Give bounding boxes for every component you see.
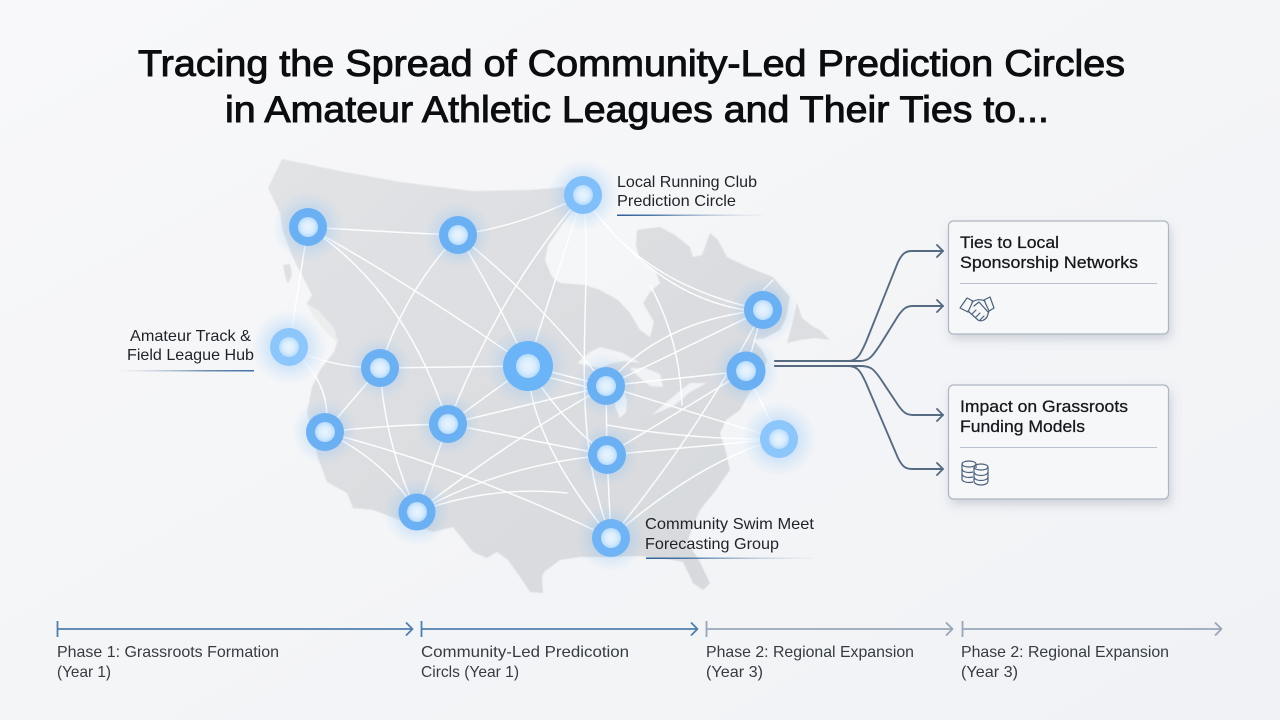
arrow: to sponsorship icon (775, 300, 943, 361)
phase: regional expansion repeat: (Year 3) (961, 664, 1018, 681)
phase: regional expansion repeat (961, 621, 1222, 681)
label: Local Running Club (617, 174, 763, 216)
card heading (960, 398, 1128, 436)
title (138, 43, 1125, 130)
node: track and field league hub (251, 309, 327, 385)
node: southwest (383, 478, 451, 546)
connector arrows to cards (775, 245, 943, 475)
timeline (57, 621, 1222, 681)
node: central hub (486, 324, 570, 408)
phase: community-led circles (421, 621, 698, 681)
node: Quebec (729, 276, 797, 344)
map: Haida Gwaii (283, 264, 292, 284)
arrow: to funding top (775, 366, 943, 421)
map of North America (268, 159, 830, 593)
card heading: Ties to Local (960, 234, 1059, 252)
icon: coin stacks (962, 461, 988, 485)
label: Community Swim Meet (645, 516, 815, 559)
label: Amateur Track and Field: Field League Hub (127, 347, 254, 364)
node: local running club (547, 159, 619, 231)
phase: grassroots formation (57, 621, 412, 681)
node: Idaho (348, 336, 412, 400)
network connections (289, 195, 779, 538)
map: Lake Huron (630, 368, 663, 387)
card: grassroots funding (948, 385, 1168, 499)
phase: community-led circles: Circls (Year 1) (421, 664, 519, 681)
node: northwest (272, 191, 344, 263)
map: Newfoundland (787, 302, 830, 343)
phase: regional expansion: (Year 3) (706, 664, 763, 681)
node: Missouri (575, 423, 639, 487)
node: Wisconsin (574, 354, 638, 418)
label: Community Swim Meet: Forecasting Group (645, 536, 779, 553)
card: sponsorship networks (948, 221, 1168, 334)
card heading: Impact on Grassroots (960, 398, 1128, 416)
label: Amateur Track and Field: Amateur Track & (130, 328, 251, 345)
phase: regional expansion (706, 621, 952, 681)
phase: regional expansion repeat: Phase 2: Regional Expansion (961, 644, 1169, 661)
icon: handshake (960, 297, 994, 321)
node: north central (424, 201, 492, 269)
map: mainland (268, 159, 790, 593)
map: Lakes Erie and Ontario (652, 383, 707, 415)
network nodes (251, 159, 817, 572)
phase: community-led circles: Community-Led Predicotion (421, 644, 629, 661)
phase: grassroots formation: (Year 1) (57, 664, 111, 681)
map: Lake Superior (577, 347, 640, 368)
title: in Amateur Athletic Leagues and Their Ties to... (225, 89, 1049, 130)
node: Ontario east (712, 337, 780, 405)
arrow: to sponsorship top (775, 245, 943, 361)
label: Community Swim Meet: Community Swim Meet (645, 516, 815, 533)
card heading (960, 234, 1138, 272)
title: Tracing the Spread of Community-Led Prediction Circles (138, 43, 1125, 84)
node: Colorado (416, 392, 480, 456)
label: Amateur Track and Field (112, 328, 254, 372)
phase: regional expansion: Phase 2: Regional Expansion (706, 644, 914, 661)
node: Atlantic (741, 401, 817, 477)
phase: grassroots formation: Phase 1: Grassroots Formation (57, 644, 279, 661)
card heading: Funding Models (960, 418, 1085, 436)
arrow: to funding icon (775, 366, 943, 475)
label: Local Running Club: Prediction Circle (617, 193, 736, 210)
label: Local Running Club: Local Running Club (617, 174, 757, 191)
map: Vancouver Island (306, 303, 338, 343)
map: Lake Michigan (615, 387, 627, 418)
node: Oregon (292, 399, 358, 465)
node: community swim meet (577, 504, 645, 572)
card heading: Sponsorship Networks (960, 254, 1138, 272)
